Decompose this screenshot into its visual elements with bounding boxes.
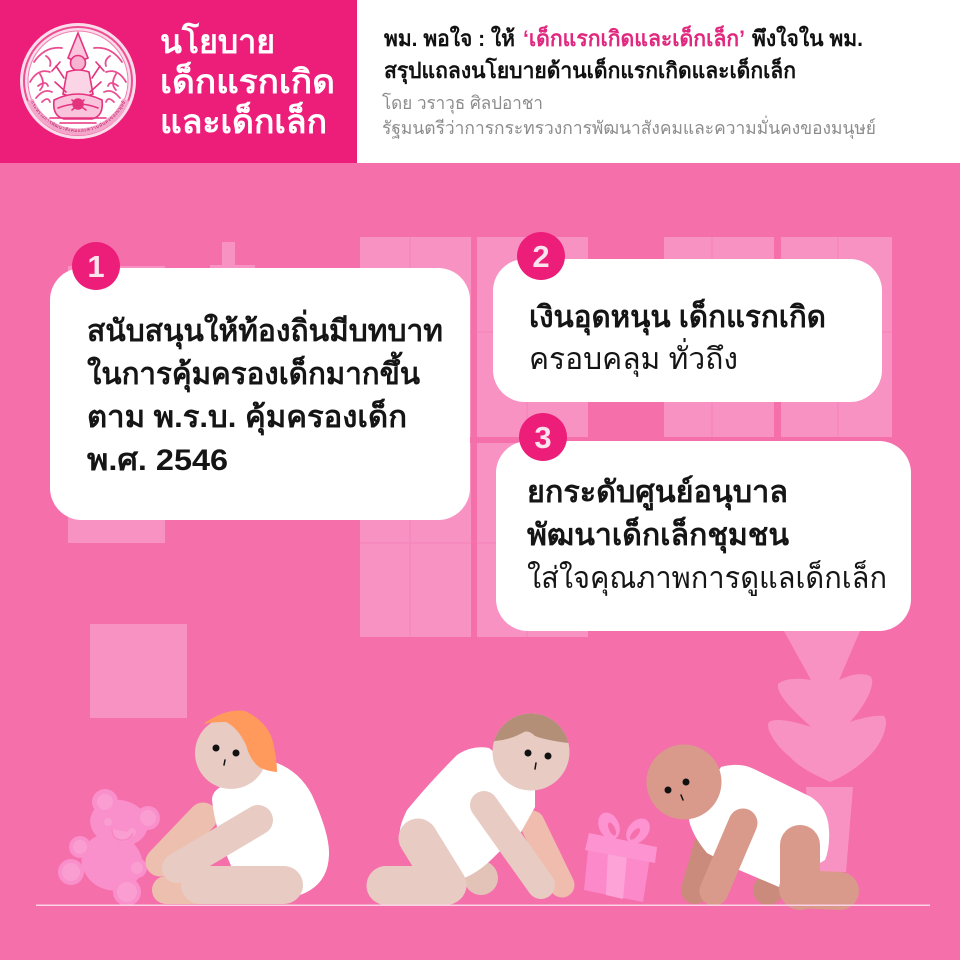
text block: author byline: โดย วราวุธ ศิลปอาชา — [382, 92, 543, 114]
title: policy name — [160, 22, 335, 140]
header: white subtitle panel — [357, 0, 960, 163]
text block: policy 3: พัฒนาเด็กเล็กชุมชน — [527, 516, 789, 554]
badge: number 1 — [72, 242, 120, 290]
text block: policy 1 — [87, 309, 443, 477]
heading: satisfaction headline: พม. พอใจ : ให้ — [384, 25, 515, 51]
text block: policy 1: พ.ศ. 2546 — [87, 444, 228, 477]
illustration: crawling baby with brown hair — [386, 700, 575, 895]
text block: author byline — [382, 92, 876, 139]
illustration: sitting baby with orange hair — [160, 711, 329, 895]
text block: policy 2 — [529, 298, 826, 378]
background: room windows and wall shapes — [68, 237, 892, 718]
panel: policy 3 card — [496, 413, 911, 631]
heading: satisfaction headline: สรุปแถลงนโยบายด้านเด็กแรกเกิดและเด็กเล็ก — [384, 56, 796, 85]
text block: policy 3: ยกระดับศูนย์อนุบาล — [527, 475, 788, 511]
heading: satisfaction headline: พึงใจใน พม. — [752, 25, 863, 51]
badge: number 2 — [517, 232, 565, 280]
badge: number 1: 1 — [87, 249, 105, 284]
title: policy name: และเด็กเล็ก — [160, 101, 327, 140]
icon: ministry seal — [20, 23, 136, 139]
ground line — [36, 904, 930, 906]
heading: satisfaction headline: ‘เด็กแรกเกิดและเด็กเล็ก’ — [523, 24, 745, 51]
text block: policy 3: ใส่ใจคุณภาพการดูแลเด็กเล็ก — [527, 559, 887, 597]
badge: number 2: 2 — [532, 239, 550, 274]
panel: policy 2 card — [493, 232, 882, 402]
text block: author byline: รัฐมนตรีว่าการกระทรวงการพัฒนาสังคมและความมั่นคงของมนุษย์ — [382, 115, 876, 139]
illustration: teddy bear — [58, 789, 160, 906]
badge: number 3 — [519, 413, 567, 461]
title: policy name: นโยบาย — [160, 22, 275, 60]
panel: policy 1 card — [50, 242, 470, 520]
text block: policy 2: ครอบคลุม ทั่วถึง — [529, 338, 738, 378]
badge: number 3: 3 — [534, 420, 552, 455]
text block: policy 3 — [527, 475, 887, 597]
text block: policy 2: เงินอุดหนุน เด็กแรกเกิด — [529, 298, 826, 336]
illustration: potted plant — [768, 631, 886, 872]
icon: gift box — [584, 809, 657, 902]
icon: ministry seal: กระทรวงการพัฒนาสังคมและความมั่นคงของมนุษย์ — [31, 100, 125, 132]
heading: satisfaction headline — [384, 24, 863, 85]
title: policy name: เด็กแรกเกิด — [160, 61, 335, 100]
text block: policy 1: ในการคุ้มครองเด็กมากขึ้น — [87, 351, 420, 393]
text block: policy 1: สนับสนุนให้ท้องถิ่นมีบทบาท — [87, 309, 443, 350]
text block: policy 1: ตาม พ.ร.บ. คุ้มครองเด็ก — [87, 398, 407, 436]
header: pink title panel — [0, 0, 357, 163]
illustration: crawling bald baby — [646, 744, 840, 905]
